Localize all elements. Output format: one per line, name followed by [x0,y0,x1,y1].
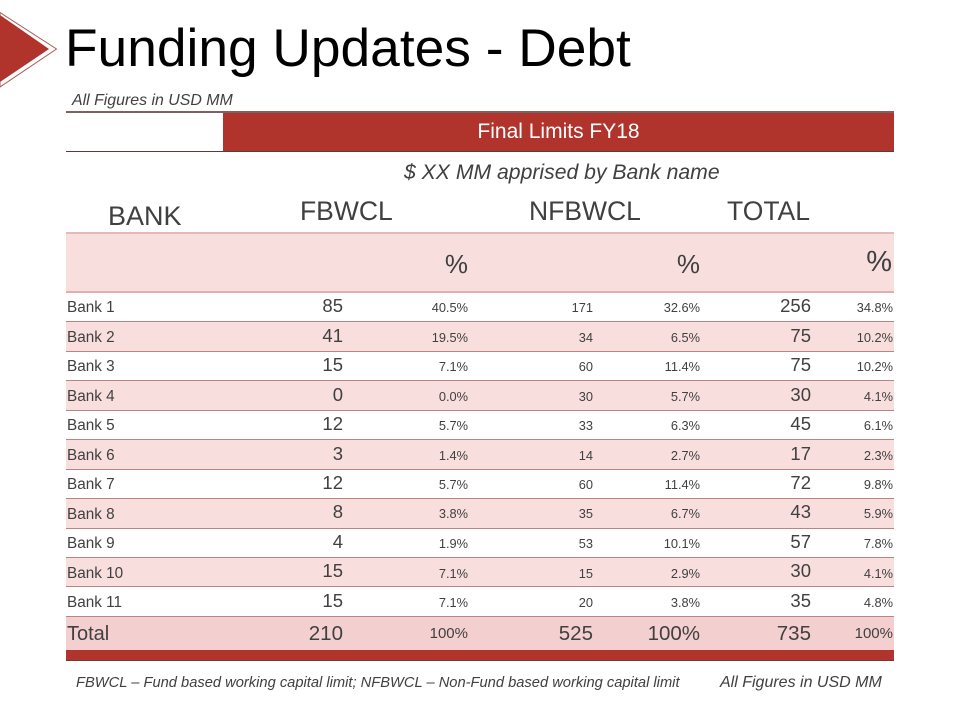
row: Bank 7: 5.7% [439,477,468,492]
column heading: TOTAL: TOTAL [727,196,810,226]
note: units: All Figures in USD MM [72,92,233,109]
row: Bank 4: Bank 4 [67,388,115,405]
row: Bank 4: 0.0% [439,389,468,404]
row: Bank 10 [66,558,894,587]
row: Total: 100% [430,625,468,642]
row: Bank 4: 5.7% [671,389,700,404]
row: Bank 6: Bank 6 [67,447,115,464]
row: Bank 3: Bank 3 [67,358,115,375]
percent heading band: % [677,249,700,279]
icon: red triangle marker [0,12,58,88]
row: Bank 6 [66,440,894,470]
row: Bank 7: 72 [790,472,811,493]
row: Bank 2: 19.5% [432,330,468,345]
row: Bank 5: 5.7% [439,418,468,433]
row: Bank 11: Bank 11 [67,594,122,611]
row: Bank 2: 6.5% [671,330,700,345]
row: Bank 2: Bank 2 [67,329,115,346]
row: Bank 10: 15 [322,560,343,581]
row: Total: 100% [648,622,700,645]
row: Bank 8: 5.9% [864,506,893,521]
row: Bank 1: 171 [572,300,593,315]
row: Bank 8: 3.8% [439,506,468,521]
row: Bank 7: Bank 7 [67,476,115,493]
row: Bank 8: 8 [333,501,343,522]
table [66,111,894,293]
row: Bank 9: 4 [333,531,343,552]
subtitle: $ XX MM apprised by Bank name [404,161,720,184]
row: Bank 11 [66,587,894,617]
row: Bank 2: 34 [579,330,593,345]
row: Bank 8: 35 [579,506,593,521]
column heading: FBWCL: FBWCL [300,196,393,226]
row: Total: 210 [309,622,343,645]
row: Bank 1: 85 [322,295,343,316]
row: Bank 7: 9.8% [864,477,893,492]
row: Bank 3: 60 [579,359,593,374]
row: Bank 9: 7.8% [864,536,893,551]
column heading: NFBWCL: NFBWCL [529,196,641,226]
row: Bank 11: 35 [790,590,811,611]
row: Bank 5 [66,410,894,440]
header band: Final Limits FY18 [66,111,894,152]
row: Bank 1 [66,292,894,322]
row: Bank 11: 20 [579,595,593,610]
row: Total: Total [67,623,109,645]
row: Bank 9: 53 [579,536,593,551]
row: Bank 3: 15 [322,354,343,375]
row: Bank 1: 256 [780,295,811,316]
percent heading band: % [445,249,468,279]
row: Bank 7: 11.4% [665,477,700,492]
row: Bank 1: Bank 1 [67,299,115,316]
row: Bank 10: 7.1% [439,566,468,581]
row: Bank 8: 43 [790,501,811,522]
title: Funding Updates - Debt [65,19,631,78]
row: Bank 6: 1.4% [439,448,468,463]
bottom red bar [66,650,894,661]
percent heading band [66,232,894,293]
row: Bank 2 [66,322,894,352]
row: Total: 100% [855,625,893,642]
row: Bank 5: 6.3% [671,418,700,433]
row: Bank 10: 2.9% [671,566,700,581]
row: Bank 9 [66,528,894,558]
row: Bank 6: 2.3% [864,448,893,463]
row: Total: 735 [777,622,811,645]
row: Bank 3: 10.2% [857,359,893,374]
row: Bank 11: 7.1% [439,595,468,610]
row: Bank 5: 45 [790,413,811,434]
row: Bank 5: Bank 5 [67,417,115,434]
row: Bank 2: 10.2% [857,330,893,345]
row: Bank 3: 7.1% [439,359,468,374]
row: Bank 10: 15 [579,566,593,581]
row: Bank 6: 14 [579,448,593,463]
row: Bank 2: 41 [322,325,343,346]
row: Bank 6: 2.7% [671,448,700,463]
row: Bank 3: 75 [790,354,811,375]
header band: Final Limits FY18: Final Limits FY18 [477,120,640,143]
footnote: abbreviations: FBWCL – Fund based working capital limit; NFBWCL – Non-Fund based working capital limit [76,675,680,691]
row: Bank 4: 30 [790,384,811,405]
row: Bank 1: 34.8% [857,300,893,315]
row: Bank 11: 15 [322,590,343,611]
row: Bank 5: 6.1% [864,418,893,433]
row: Bank 8: 6.7% [671,506,700,521]
row: Bank 8 [66,499,894,529]
row: Total: 525 [559,622,593,645]
row: Bank 3: 11.4% [665,359,700,374]
row: Bank 9: Bank 9 [67,535,115,552]
row: Bank 6: 17 [790,443,811,464]
row: Bank 7: 12 [322,472,343,493]
row: Total [66,617,894,651]
row: Bank 11: 4.8% [864,595,893,610]
row: Bank 5: 33 [579,418,593,433]
row: Bank 4: 0 [333,384,343,405]
row: Bank 9: 10.1% [664,536,700,551]
row: Bank 10: 4.1% [864,566,893,581]
note: units bottom: All Figures in USD MM [720,674,882,691]
row: Bank 2: 75 [790,325,811,346]
row: Bank 1: 32.6% [664,300,700,315]
row: Bank 9: 57 [790,531,811,552]
row: Bank 11: 3.8% [671,595,700,610]
row: Bank 5: 12 [322,413,343,434]
row: Bank 4 [66,381,894,411]
row: Bank 4: 30 [579,389,593,404]
row: Bank 4: 4.1% [864,389,893,404]
percent heading band: % [866,246,892,278]
row: Bank 1: 40.5% [432,300,468,315]
row: Bank 10: 30 [790,560,811,581]
row: Bank 6: 3 [333,443,343,464]
row: Bank 8: Bank 8 [67,506,115,523]
row: Bank 3 [66,351,894,381]
column heading: BANK: BANK [108,201,182,231]
row: Bank 7 [66,469,894,499]
row: Bank 9: 1.9% [439,536,468,551]
row: Bank 7: 60 [579,477,593,492]
row: Bank 10: Bank 10 [67,565,123,582]
